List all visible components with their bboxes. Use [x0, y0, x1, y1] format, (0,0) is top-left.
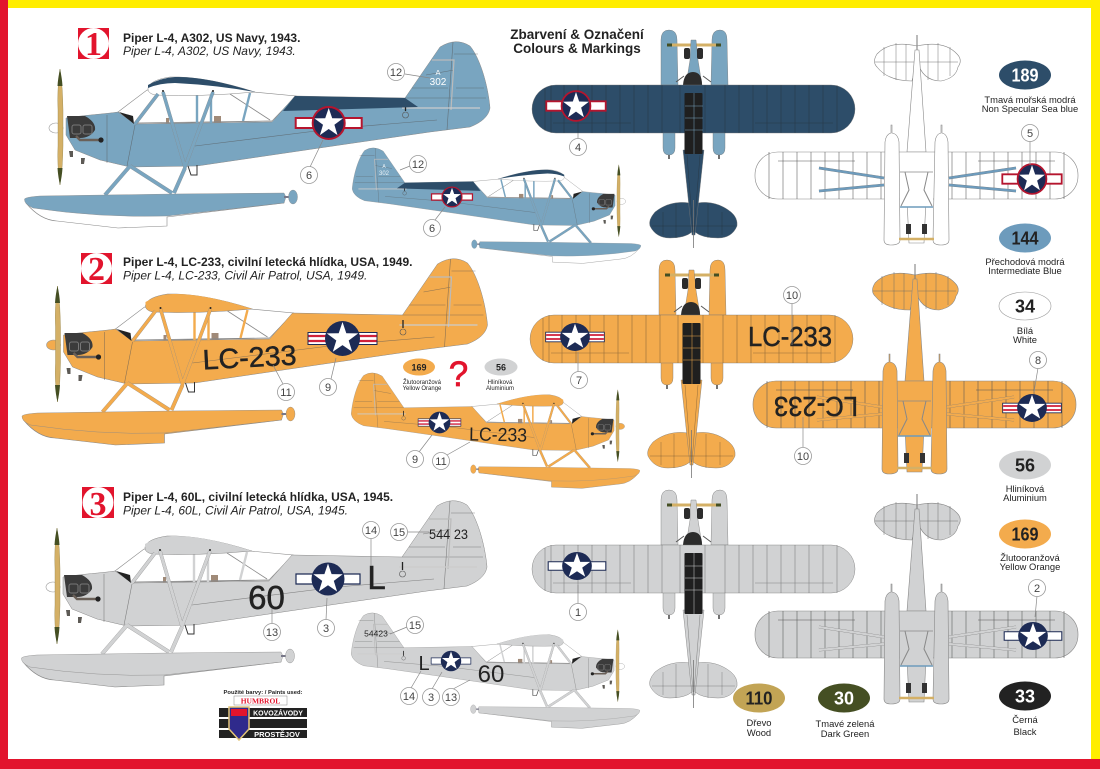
- callout numbers: 10: [786, 290, 798, 302]
- swatch: 169: 169: [1012, 524, 1038, 544]
- plane 1 small side view: 302: [379, 171, 390, 177]
- swatch: 144: Přechodová modrá: [985, 256, 1065, 267]
- swatch: 169: [999, 520, 1060, 572]
- plane 1 underside view: [755, 35, 1078, 245]
- plane 3 side view: 544 23: [429, 526, 468, 542]
- paints logo: Použité barvy: / Paints used:: [224, 690, 303, 696]
- badge 3: 3: [90, 486, 106, 523]
- swatch: 30: [816, 684, 875, 739]
- plane 1 side view: 302: [430, 77, 447, 88]
- badge 1: 1: [85, 26, 102, 63]
- small swatch: 169: Yellow Orange: [403, 386, 442, 392]
- swatch: 30: 30: [834, 688, 854, 708]
- swatch: 34: White: [1013, 334, 1037, 345]
- badge 2: 2: [88, 251, 105, 288]
- plane 2 top view: LC-233: [748, 321, 832, 352]
- small swatch: 56: [484, 358, 518, 392]
- swatch: 34: 34: [1015, 296, 1035, 316]
- callout numbers: 4: [575, 142, 581, 154]
- callout numbers: 14: [403, 691, 415, 703]
- callout numbers: 9: [412, 454, 418, 466]
- swatch: 56: 56: [1015, 456, 1035, 476]
- swatch: 189: 189: [1012, 66, 1038, 86]
- swatch: 189: Tmavá mořská modrá: [984, 94, 1076, 105]
- plane 3 side view: L: [367, 559, 386, 596]
- callout numbers: 7: [576, 375, 582, 387]
- paints logo: PROSTĚJOV: [254, 730, 300, 739]
- heading: colours and markings: [510, 27, 645, 56]
- plane 1 small side view: [352, 148, 641, 263]
- title 3: Piper L-4, 60L, Civil Air Patrol, USA, 1945.: [123, 504, 348, 518]
- callout numbers: 13: [266, 627, 278, 639]
- swatch: 56: Aluminium: [1003, 492, 1047, 503]
- swatch: 189: Non Specular Sea blue: [982, 103, 1078, 114]
- swatch: 189: [982, 60, 1078, 114]
- small swatch: 169: [403, 358, 442, 392]
- small swatch: 56: Aluminium: [486, 386, 514, 392]
- callout numbers: 1: [575, 607, 581, 619]
- title 1: [123, 31, 300, 58]
- callout numbers: 12: [390, 67, 402, 79]
- plane 1 top view: [532, 30, 855, 248]
- swatch: 56: Hliníková: [1006, 483, 1045, 494]
- heading: colours and markings: Zbarvení & Označení: [510, 27, 645, 42]
- title 2: Piper L-4, LC-233, civilní letecká hlídka, USA, 1949.: [123, 255, 412, 269]
- swatch: 169: Yellow Orange: [1000, 561, 1060, 572]
- callout numbers: 10: [797, 451, 809, 463]
- plane 3 top view: [532, 490, 855, 708]
- callout numbers: 11: [435, 456, 447, 468]
- plane 2 side view: [22, 259, 487, 445]
- plane 2 underside view: [753, 264, 1076, 474]
- swatch: 33: Černá: [1012, 714, 1039, 725]
- plane 3 side view: 60: [248, 579, 285, 616]
- plane 1 small side view: A: [382, 164, 386, 170]
- callout numbers: 6: [429, 223, 435, 235]
- swatch: 34: [999, 292, 1051, 345]
- plane 1 side view: [24, 42, 490, 228]
- paints logo: [219, 690, 307, 740]
- callout numbers: 3: [323, 623, 329, 635]
- callout numbers: 3: [428, 692, 434, 704]
- plane 3 side view: [21, 501, 487, 687]
- callout numbers: [264, 64, 1046, 706]
- callout numbers: 11: [280, 387, 292, 399]
- small swatch: 169: 169: [411, 362, 427, 372]
- paints logo: HUMBROL: [241, 696, 280, 706]
- title 2: Piper L-4, LC-233, Civil Air Patrol, USA, 1949.: [123, 268, 367, 282]
- plane 2 small side view: LC-233: [469, 424, 527, 447]
- callout numbers: 9: [325, 382, 331, 394]
- plane 3 small side view: [351, 613, 640, 728]
- swatch: 144: [985, 224, 1065, 276]
- title 2: [123, 255, 412, 282]
- swatch: 56: [999, 450, 1051, 503]
- callout numbers: 15: [409, 620, 421, 632]
- plane 3 small side view: 60: [478, 661, 504, 688]
- plane 3 small side view: 54423: [364, 628, 388, 638]
- badge 1: [78, 26, 109, 63]
- callout numbers: 8: [1035, 355, 1041, 367]
- swatch: 110: [733, 684, 785, 738]
- small swatch: 56: 56: [496, 362, 506, 372]
- badge 3: [82, 486, 114, 523]
- callout numbers: 2: [1034, 583, 1040, 595]
- title 1: Piper L-4, A302, US Navy, 1943.: [123, 44, 296, 58]
- swatch: 34: Bílá: [1017, 325, 1034, 336]
- callout numbers: 13: [445, 692, 457, 704]
- title 3: Piper L-4, 60L, civilní letecká hlídka, USA, 1945.: [123, 490, 393, 504]
- small swatch: 56: Hliníková: [488, 380, 513, 386]
- swatch: 110: Wood: [747, 727, 771, 738]
- title 3: [123, 490, 393, 518]
- heading: colours and markings: Colours & Markings: [513, 41, 641, 56]
- callout numbers: 12: [412, 159, 424, 171]
- question mark: ?: [449, 355, 468, 394]
- swatch: 110: Dřevo: [746, 717, 772, 728]
- plane 2 underside view: LC-233: [774, 391, 858, 422]
- callout numbers: 15: [393, 527, 405, 539]
- badge 2: [81, 251, 112, 288]
- swatch: 33: [999, 682, 1051, 737]
- plane 1 side view: A: [435, 68, 441, 77]
- swatch: 33: 33: [1015, 686, 1035, 706]
- callout numbers: 14: [365, 525, 377, 537]
- title 1: Piper L-4, A302, US Navy, 1943.: [123, 31, 300, 45]
- plane 3 small side view: L: [418, 653, 430, 675]
- paints logo: KOVOZÁVODY: [253, 708, 303, 718]
- small swatch: 169: Žlutooranžová: [403, 378, 442, 386]
- plane 2 small side view: [351, 373, 640, 488]
- swatch: 110: 110: [746, 688, 772, 708]
- swatch: 33: Black: [1014, 726, 1037, 737]
- swatch: 144: 144: [1012, 228, 1038, 248]
- swatch: 30: Dark Green: [821, 728, 869, 739]
- swatch: 30: Tmavé zelená: [816, 718, 875, 729]
- callout numbers: 5: [1027, 128, 1033, 140]
- callout numbers: 6: [306, 170, 312, 182]
- swatch: 169: Žlutooranžová: [1000, 552, 1060, 563]
- plane 2 side view: LC-233: [202, 340, 297, 375]
- swatch: 144: Intermediate Blue: [988, 265, 1062, 276]
- plane 3 underside view: [755, 494, 1078, 704]
- plane 2 top view: [530, 260, 853, 478]
